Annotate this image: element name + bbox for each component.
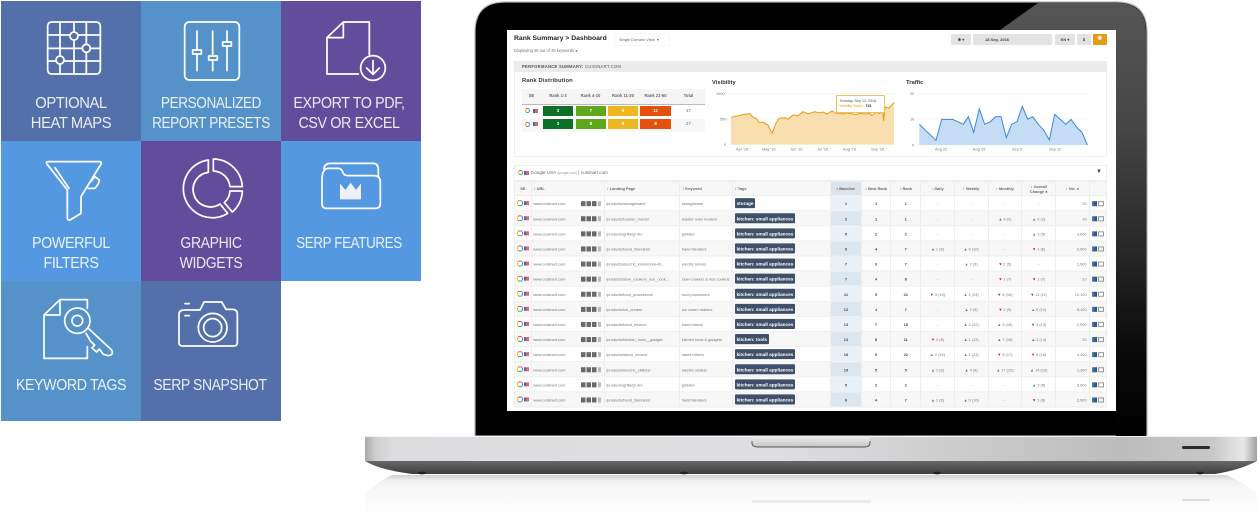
laptop screen: dashboard: Rank 1-3 [549,93,567,98]
row: electric skillets: 1,300 [1077,367,1087,372]
row: hand mixers: 7 [875,321,877,326]
keyword rankings table: ↕ Keyword [682,186,702,191]
feature tile: personalized report presets: PERSONALIZED [161,95,261,112]
row: ice cream makers: 4 [875,306,877,311]
row: food processors: ▼ 11 (11) [1030,291,1047,296]
row: food processors: 22 [904,291,908,296]
row: electric knives: 3 [875,261,877,266]
laptop screen: dashboard: 27 [686,108,691,113]
feature tile: optional heat maps [1,1,141,141]
row: stand mixers: 16 [844,352,848,357]
keyword rankings table: ↕ Tags [735,186,746,191]
row: hand blenders: 4 [875,246,877,251]
laptop screen: dashboard: 3 [557,108,559,113]
row: electric knives: kitchen: small appliances [737,261,793,266]
feature tile: serp snapshot: SERP SNAPSHOT [153,377,267,394]
row: hand blenders [517,242,1104,256]
visibility chart: Sep '16 [871,146,884,152]
row: hand blenders: ▲ 9 (10) [964,246,979,251]
row: stand mixers [517,347,1104,361]
row: griddler: /products/grills/gr-4n/ [606,231,643,236]
row: food processors: /products/food_processors/ [606,291,653,296]
laptop screen: dashboard: Total [684,93,693,98]
row: griddler: griddler [682,231,695,236]
row: griddler: 2 [905,231,907,236]
row: hand blenders repeat: /products/hand_blenders/ [606,397,650,402]
row: hand mixers: kitchen: small appliances [737,321,793,326]
row: electric knives: - [937,261,938,266]
keyword rankings table: ↕ Best Rank [865,186,887,191]
laptop screen: dashboard: 7 [590,108,592,113]
laptop screen: dashboard: 6 [622,108,624,113]
row: slow cookers: slow cookers & rice cookers [682,276,730,281]
row: toaster oven broilers: 2 [845,216,847,221]
row: hand blenders repeat: 6 [845,397,847,402]
traffic chart: Aug 22 [935,146,947,152]
row: toaster oven broilers: kitchen: small appliances [737,216,793,221]
row: hand mixers: ▼ 5 (13) [1031,321,1046,326]
row: slow cookers: 4 [875,276,877,281]
row: ice cream makers: 8,100 [1077,306,1087,311]
feature tile: powerful filters: FILTERS [43,255,99,272]
row: hand mixers: 13 [844,321,848,326]
row: hand blenders: kitchen: small appliances [737,246,793,251]
row: hand blenders repeat: kitchen: small appliances [737,397,793,402]
row: storageware: 1 [875,201,877,206]
visibility chart: Jul '16 [817,146,828,152]
laptop reflection [365,475,1257,512]
row: electric skillets: ▲ 17 (22) [996,367,1014,372]
laptop screen: dashboard: 3 [557,121,559,126]
row: toaster oven broilers: ▲ 9 (2) [998,216,1011,221]
row: kitchen tools: ▼ 3 (8) [931,337,944,342]
row: griddler: kitchen: small appliances [737,231,793,236]
row: food processors: ▲ 2 (24) [964,291,979,296]
row: food processors: ▼ 6 (16) [997,291,1012,296]
row: stand mixers: kitchen: small appliances [737,352,793,357]
row: griddler: - [1004,231,1006,236]
row: electric skillets: /products/electric_skillets/ [606,367,651,372]
row: griddler [517,226,1104,240]
feature tile: personalized report presets: REPORT PRESETS [152,115,270,132]
keyword rankings table: ↕ Weekly [963,186,979,191]
feature tile: personalized report presets [141,1,281,141]
row: storageware: - [970,201,972,206]
traffic chart: Sep 5 [1012,146,1022,152]
row: hand mixers: 18 [904,321,908,326]
row: hand blenders: 2,900 [1077,246,1087,251]
feature tile: optional heat maps: HEAT MAPS [31,115,111,132]
row: hand blenders repeat: - [1004,397,1006,402]
row: electric knives: ▼ 2 (5) [998,261,1011,266]
row: ice cream makers: ▼ 2 (5) [998,306,1011,311]
row: ice cream makers [517,302,1104,316]
row: ice cream makers: ▲ 2 (9) [965,306,978,311]
feature tile: powerful filters: POWERFUL [32,235,110,252]
row: griddler: 3,600 [1077,231,1087,236]
row: stand mixers: www.cuisinart.com [533,352,565,357]
row: slow cookers: ▼ 1 (7) [1032,276,1045,281]
row: ice cream makers: kitchen: small appliances [737,306,793,311]
row: storageware: /products/storageware/ [606,201,646,206]
row: slow cookers: 8 [905,276,907,281]
toolbar: ✹ [1097,36,1102,42]
laptop screen: dashboard: Rank 21-50 [644,93,667,98]
traffic chart: Aug 29 [973,146,985,152]
row: stand mixers: 9 [875,352,877,357]
row: electric skillets: 19 [844,367,848,372]
row: storageware: storageware [682,201,703,206]
row: griddler repeat [517,378,1104,392]
rank distribution table [522,89,705,129]
row: hand blenders: ▲ 1 (8) [931,246,944,251]
row: food processors: food processors [682,291,709,296]
row: griddler repeat: griddler [682,382,695,387]
row: hand blenders repeat: ▼ 1 (6) [1032,397,1045,402]
row: storageware: - [937,201,938,206]
rank distribution heading: Rank Distribution [522,78,573,84]
keyword rankings table: Change ● [1030,189,1048,194]
keyword count: Displaying 45 out of 45 keywords ● [514,48,578,53]
row: hand blenders repeat: 2,900 [1077,397,1087,402]
row: hand mixers: 2,900 [1077,321,1087,326]
row: storageware: storage [737,201,754,206]
row: electric knives: /products/electric_knives/cek-40... [606,261,665,266]
laptop lid [475,2,1147,436]
row: storageware: 20 [1082,201,1087,206]
row: hand blenders: - [1004,246,1006,251]
row: slow cookers: kitchen: small appliances [737,276,793,281]
row: electric knives: ▲ 2 (9) [965,261,978,266]
visibility chart: May '16 [762,146,776,152]
row: slow cookers: ▼ 1 (7) [998,276,1011,281]
visibility chart: Aug '16 [843,146,856,152]
row: toaster oven broilers: ▲ 9 (2) [1032,216,1045,221]
row: electric skillets: ▲ 14 (19) [1030,367,1047,372]
panel header [514,61,1107,72]
keyword rankings table: ↕ Monthly [996,186,1014,191]
row: hand blenders repeat: www.cuisinart.com [533,397,565,402]
view selector [615,34,669,45]
keyword table header bar: ▼ [1096,169,1102,175]
row: food processors: 11 [844,291,848,296]
laptop screen: dashboard: Rank 11-20 [612,93,634,98]
visibility tooltip: Tuesday, Sep 13, 2016 [839,98,876,102]
row: hand blenders repeat [517,392,1104,406]
row: food processors: 5 [875,291,877,296]
toolbar: EN ▾ [1061,37,1069,42]
row: hand blenders: ▼ 1 (6) [1032,246,1045,251]
row: toaster oven broilers: www.cuisinart.com [533,216,565,221]
row: ice cream makers: www.cuisinart.com [533,306,565,311]
row: food processors: kitchen: small appliances [737,291,793,296]
row: ice cream makers: - [937,306,938,311]
feature tile: powerful filters [1,141,141,281]
keyword rankings table: ↕ Landing Page [607,186,635,191]
view selector: Single Domain View ▾ [619,37,659,42]
row: griddler repeat: 2 [875,382,877,387]
visibility chart: Visibility [712,80,737,86]
visibility chart: Apr '16 [736,146,748,152]
row: griddler repeat: www.cuisinart.com [533,382,565,387]
row: electric knives: 7 [845,261,847,266]
row: hand blenders repeat: hand blenders [682,397,706,402]
row: toaster oven broilers: 1 [875,216,877,221]
feature tile: serp features [281,141,421,281]
row: electric knives: - [1038,261,1039,266]
row: toaster oven broilers [517,211,1104,226]
row: ice cream makers: ice cream makers [682,306,712,311]
row: kitchen tools: /products/kitchen_tools__gadget... [606,337,665,342]
row: electric skillets: 5 [875,367,877,372]
row: hand blenders repeat: ▲ 9 (10) [964,397,979,402]
row: hand blenders: 7 [905,246,907,251]
row: electric knives: 7 [905,261,907,266]
row: hand mixers: - [937,321,938,326]
row: toaster oven broilers: toaster oven broilers [682,216,717,221]
row: kitchen tools: ▲ 3 (14) [1031,337,1046,342]
row: hand blenders: www.cuisinart.com [533,246,565,251]
row: slow cookers: - [937,276,938,281]
row: ice cream makers: 12 [844,306,848,311]
row: electric knives: www.cuisinart.com [533,261,565,266]
row: hand blenders repeat: ▲ 1 (8) [931,397,944,402]
laptop screen: dashboard: Rank 4-10 [581,93,600,98]
row: kitchen tools: 8 [875,337,877,342]
row: toaster oven broilers: 1 [905,216,907,221]
row: electric skillets: www.cuisinart.com [533,367,565,372]
row: griddler repeat: /products/grills/gr-4n/ [606,382,643,387]
row: hand blenders: hand blenders [682,246,706,251]
laptop screen: dashboard: 27 [686,121,691,126]
row: kitchen tools: ▲ 7 (18) [997,337,1012,342]
row: griddler repeat: kitchen: small appliances [737,382,793,387]
keyword rankings table: ↕ Overall [1031,184,1047,189]
laptop screen: dashboard: 11 [653,108,658,113]
row: hand mixers [517,317,1104,331]
row: hand mixers: hand mixers [682,321,703,326]
row: griddler: ▲ 3 (5) [1032,231,1045,236]
row: food processors [517,287,1104,301]
feature tile: export to pdf, csv or excel: EXPORT TO PDF, [293,95,405,112]
row: stand mixers: 4,400 [1077,352,1087,357]
feature tile: export to pdf, csv or excel [281,1,421,141]
feature tile: serp features: SERP FEATURES [296,235,402,252]
row: storageware: www.cuisinart.com [533,201,565,206]
row: stand mixers: ▲ 2 (24) [930,352,945,357]
visibility chart: 1000 [716,91,725,96]
row: food processors: ▼ 3 (19) [930,291,945,296]
row: storageware: - [1004,201,1006,206]
row: slow cookers: www.cuisinart.com [533,276,565,281]
traffic chart: 0 [912,142,915,148]
row: griddler repeat: - [1004,382,1006,387]
row: toaster oven broilers: /products/toaster_ovens/ [606,216,649,221]
visibility tooltip: Visibility Score: 741 [839,104,872,108]
row: kitchen tools: ▲ 1 (12) [964,337,979,342]
visibility tooltip [836,95,885,113]
feature tile: graphic widgets: WIDGETS [180,255,242,272]
laptop screen: dashboard: 8 [654,121,657,126]
row: slow cookers: 7 [845,276,847,281]
keyword rankings table: ↕ URL [534,186,545,191]
feature tile: serp snapshot [141,281,281,421]
row: toaster oven broilers: 20 [1082,216,1087,221]
row: stand mixers: stand mixers [682,352,704,357]
row: griddler: www.cuisinart.com [533,231,565,236]
keyword rankings table: ↕ Rank [899,186,912,191]
keyword rankings table: ↕ Vol. ● [1066,186,1079,191]
feature tile: keyword tags: KEYWORD TAGS [16,377,126,394]
row: electric skillets: kitchen: small appliances [737,367,793,372]
row: electric skillets: 5 [905,367,907,372]
row: stand mixers: ▼ 5 (17) [997,352,1012,357]
row: electric skillets: ▲ 1 (6) [931,367,944,372]
feature tile: optional heat maps: OPTIONAL [35,95,107,112]
row: slow cookers: /products/slow_cookers_rice_cook... [606,276,669,281]
row: kitchen tools: kitchen tools & gadgets [682,337,722,342]
keyword rankings table [514,181,1107,408]
row: toaster oven broilers: - [970,216,972,221]
row: hand mixers: www.cuisinart.com [533,321,565,326]
keyword table header bar [514,165,1107,181]
row: slow cookers: - [970,276,972,281]
row: storageware: 1 [905,201,907,206]
toolbar [951,34,1107,45]
row: hand mixers: ▲ 5 (18) [997,321,1012,326]
row: griddler repeat: 5 [845,382,847,387]
row: griddler: 5 [845,231,847,236]
row: kitchen tools: kitchen: tools [737,337,767,342]
laptop base [365,436,1257,474]
row: electric knives [517,256,1104,270]
row: hand blenders: /products/hand_blenders/ [606,246,650,251]
row: storageware: - [1038,201,1039,206]
row: stand mixers: /products/stand_mixers/ [606,352,648,357]
row: toaster oven broilers: - [937,216,938,221]
row: kitchen tools [517,332,1104,346]
row: griddler repeat: - [970,382,972,387]
row: electric skillets: ▲ 4 (9) [965,367,978,372]
row: griddler repeat: - [937,382,938,387]
laptop screen: dashboard: 8 [590,121,592,126]
row: hand blenders repeat: 7 [905,397,907,402]
keyword rankings table: ↕ Daily [931,186,944,191]
row: griddler: - [937,231,938,236]
panel header: PERFORMANCE SUMMARY: CUISINART.COM [522,64,621,69]
row: hand blenders: 6 [845,246,847,251]
row: electric skillets [517,362,1104,376]
row: storageware: 1 [845,201,847,206]
row: electric knives: electric knives [682,261,706,266]
feature tile: graphic widgets: GRAPHIC [180,235,242,252]
feature tile: export to pdf, csv or excel: CSV OR EXCEL [298,115,400,132]
row: stand mixers: ▲ 1 (23) [964,352,979,357]
row: electric knives: 1,900 [1077,261,1087,266]
visibility chart: 0 [724,142,727,147]
laptop screen: dashboard: SE [529,93,534,98]
visibility chart: 500 [720,116,727,122]
toolbar: 18 Sep, 2016 [985,37,1009,42]
row: hand blenders repeat: 4 [875,397,877,402]
dashboard title: Rank Summary > Dashboard [514,35,607,42]
row: stand mixers: ▼ 6 (16) [1031,352,1046,357]
row: kitchen tools: 11 [904,337,908,342]
row: griddler repeat: 3,600 [1077,382,1087,387]
row: hand mixers: /products/hand_mixers/ [606,321,647,326]
row: kitchen tools: 14 [844,337,848,342]
row: kitchen tools: www.cuisinart.com [533,337,565,342]
traffic chart: 10 [910,116,915,122]
traffic chart: Sep 12 [1049,146,1061,152]
toolbar: ✹ ▾ [958,37,964,42]
row: ice cream makers: 7 [905,306,907,311]
feature tile: graphic widgets [141,141,281,281]
row: griddler repeat: 2 [905,382,907,387]
keyword rankings table: SE [520,186,525,191]
feature tile: keyword tags [1,281,141,421]
toolbar: ⬇ [1082,37,1086,42]
row: ice cream makers: ▲ 5 (12) [1031,306,1046,311]
row: storageware [517,196,1104,210]
row: griddler: 2 [875,231,877,236]
row: slow cookers: 10 [1082,276,1087,281]
row: food processors: www.cuisinart.com [533,291,565,296]
row: ice cream makers: /products/ice_cream/ [606,306,642,311]
laptop screen: dashboard [507,30,1116,411]
keyword rankings table: ▪ Baseline [837,186,855,191]
row: food processors: 12,100 [1075,291,1087,296]
row: slow cookers [517,272,1104,286]
keyword table header bar: Google USA (google.com) | cuisinart.com [531,170,608,175]
row: kitchen tools: 20 [1082,337,1087,342]
panel: performance summary [514,61,1107,157]
laptop screen: dashboard: 8 [622,121,624,126]
row: hand mixers: ▲ 4 (22) [964,321,979,326]
row: stand mixers: 22 [904,352,908,357]
traffic chart: Traffic [906,80,924,86]
traffic chart: 20 [910,91,915,96]
row: griddler: - [970,231,972,236]
row: electric skillets: electric skillets [682,367,707,372]
row: griddler repeat: ▲ 3 (5) [1032,382,1045,387]
visibility chart: Jun '16 [790,146,802,152]
